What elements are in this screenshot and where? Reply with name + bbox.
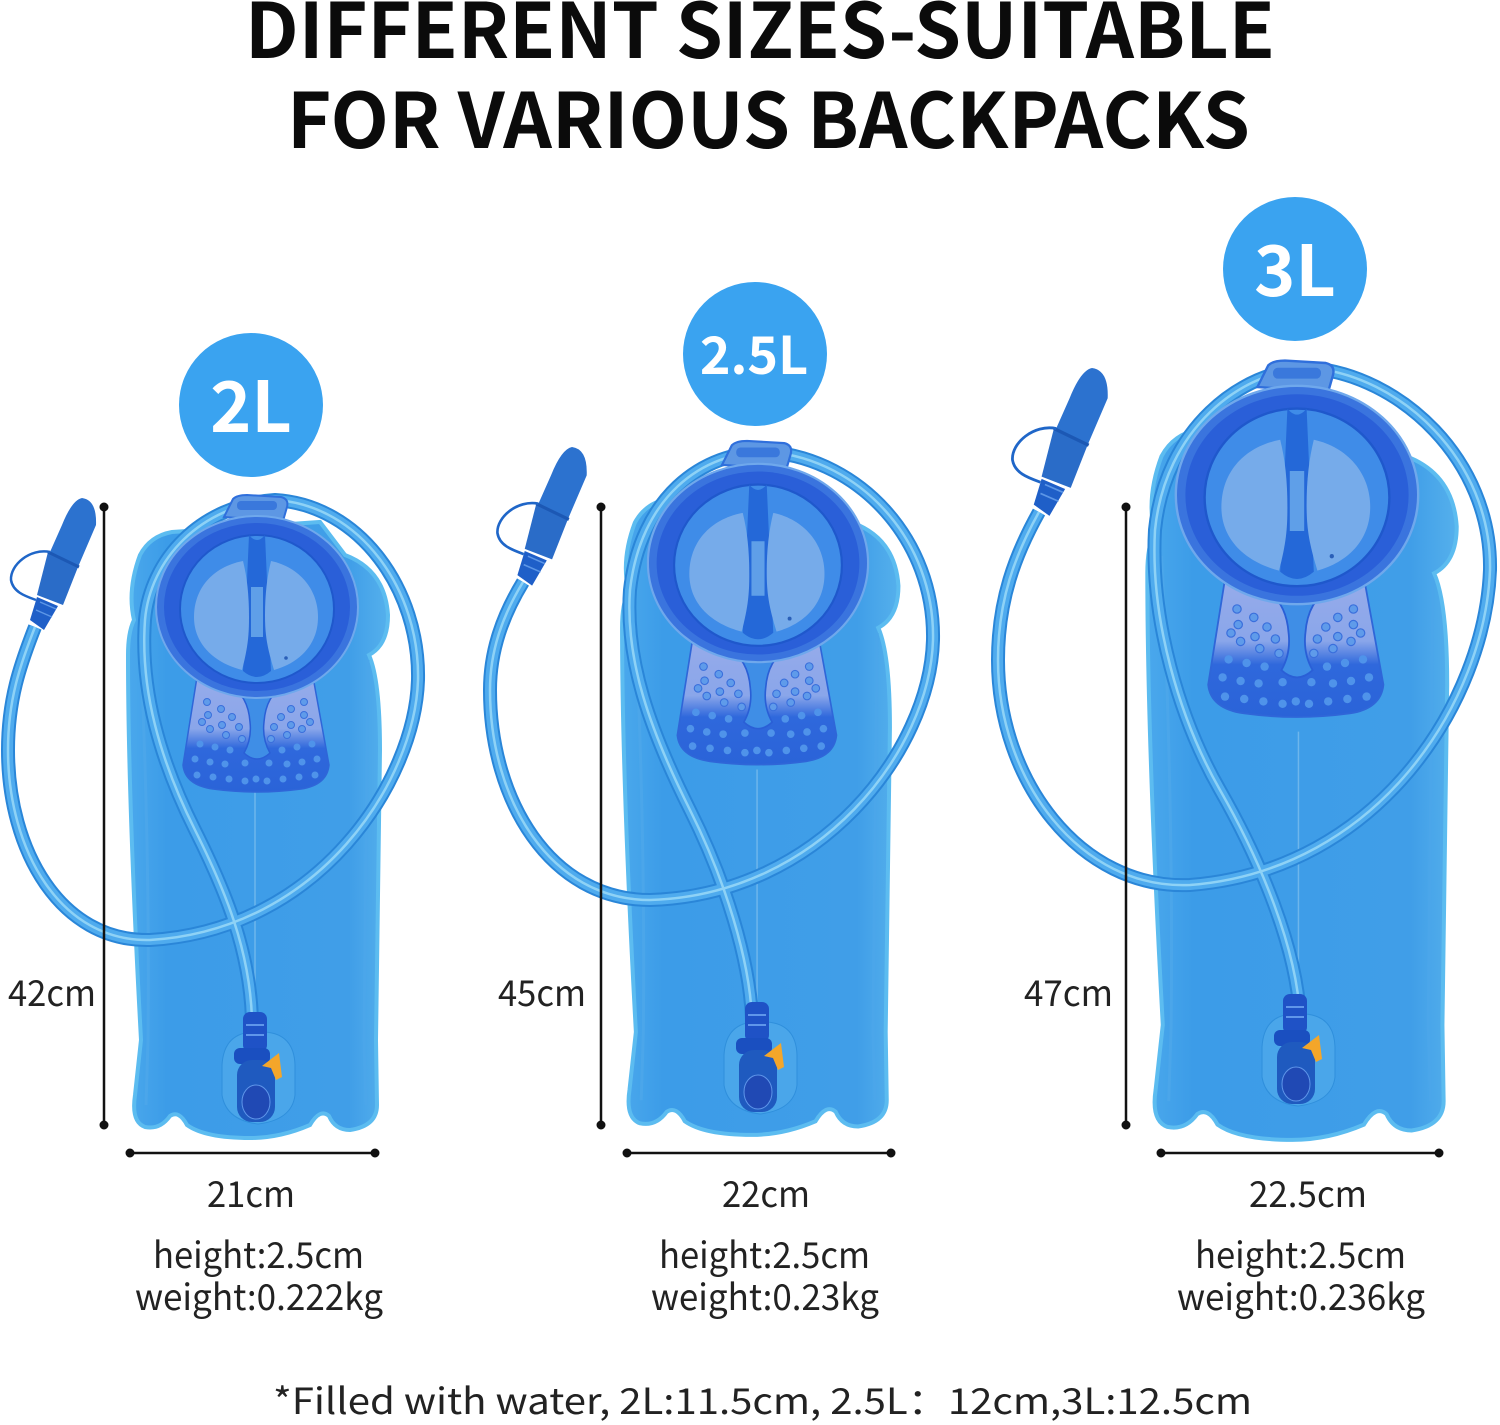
dimension lines: 3L	[1122, 503, 1443, 1157]
dimension lines: 2L	[100, 503, 379, 1157]
labels: 3L	[1024, 965, 1425, 1321]
footnote: *Filled with water, 2L:11.5cm, 2.5L：12cm,3L:12.5cm	[273, 1373, 1252, 1425]
badge: 2.5L: 2.5L	[700, 314, 808, 389]
badge: 2L: 2L	[210, 352, 292, 453]
labels: 2L: height:2.5cm	[153, 1227, 364, 1279]
labels: 2.5L: height:2.5cm	[659, 1227, 870, 1279]
badge: 3L: 3L	[1254, 216, 1336, 317]
dimension lines: 2.5L	[597, 503, 895, 1157]
badge: 2L	[179, 333, 323, 477]
labels: 2.5L	[498, 965, 879, 1321]
labels: 2L	[8, 965, 383, 1321]
labels: 2.5L: weight:0.23kg	[651, 1269, 879, 1321]
labels: 3L: height:2.5cm	[1195, 1227, 1406, 1279]
title: FOR VARIOUS BACKPACKS	[287, 60, 1250, 170]
labels: 2L: weight:0.222kg	[135, 1269, 383, 1321]
labels: 2L: 42cm	[8, 965, 96, 1017]
badge: 3L	[1223, 197, 1367, 341]
badge: 2.5L	[683, 282, 827, 426]
reservoir: 3L	[998, 361, 1490, 1140]
labels: 2.5L: 45cm	[498, 965, 586, 1017]
labels: 2L: 21cm	[207, 1166, 295, 1218]
reservoir: 2L	[8, 495, 418, 1138]
labels: 3L: 47cm	[1024, 965, 1113, 1017]
labels: 3L: weight:0.236kg	[1177, 1269, 1425, 1321]
reservoir: 2.5L	[490, 441, 933, 1135]
title	[245, 0, 1275, 170]
labels: 2.5L: 22cm	[722, 1166, 810, 1218]
labels: 3L: 22.5cm	[1249, 1166, 1367, 1218]
